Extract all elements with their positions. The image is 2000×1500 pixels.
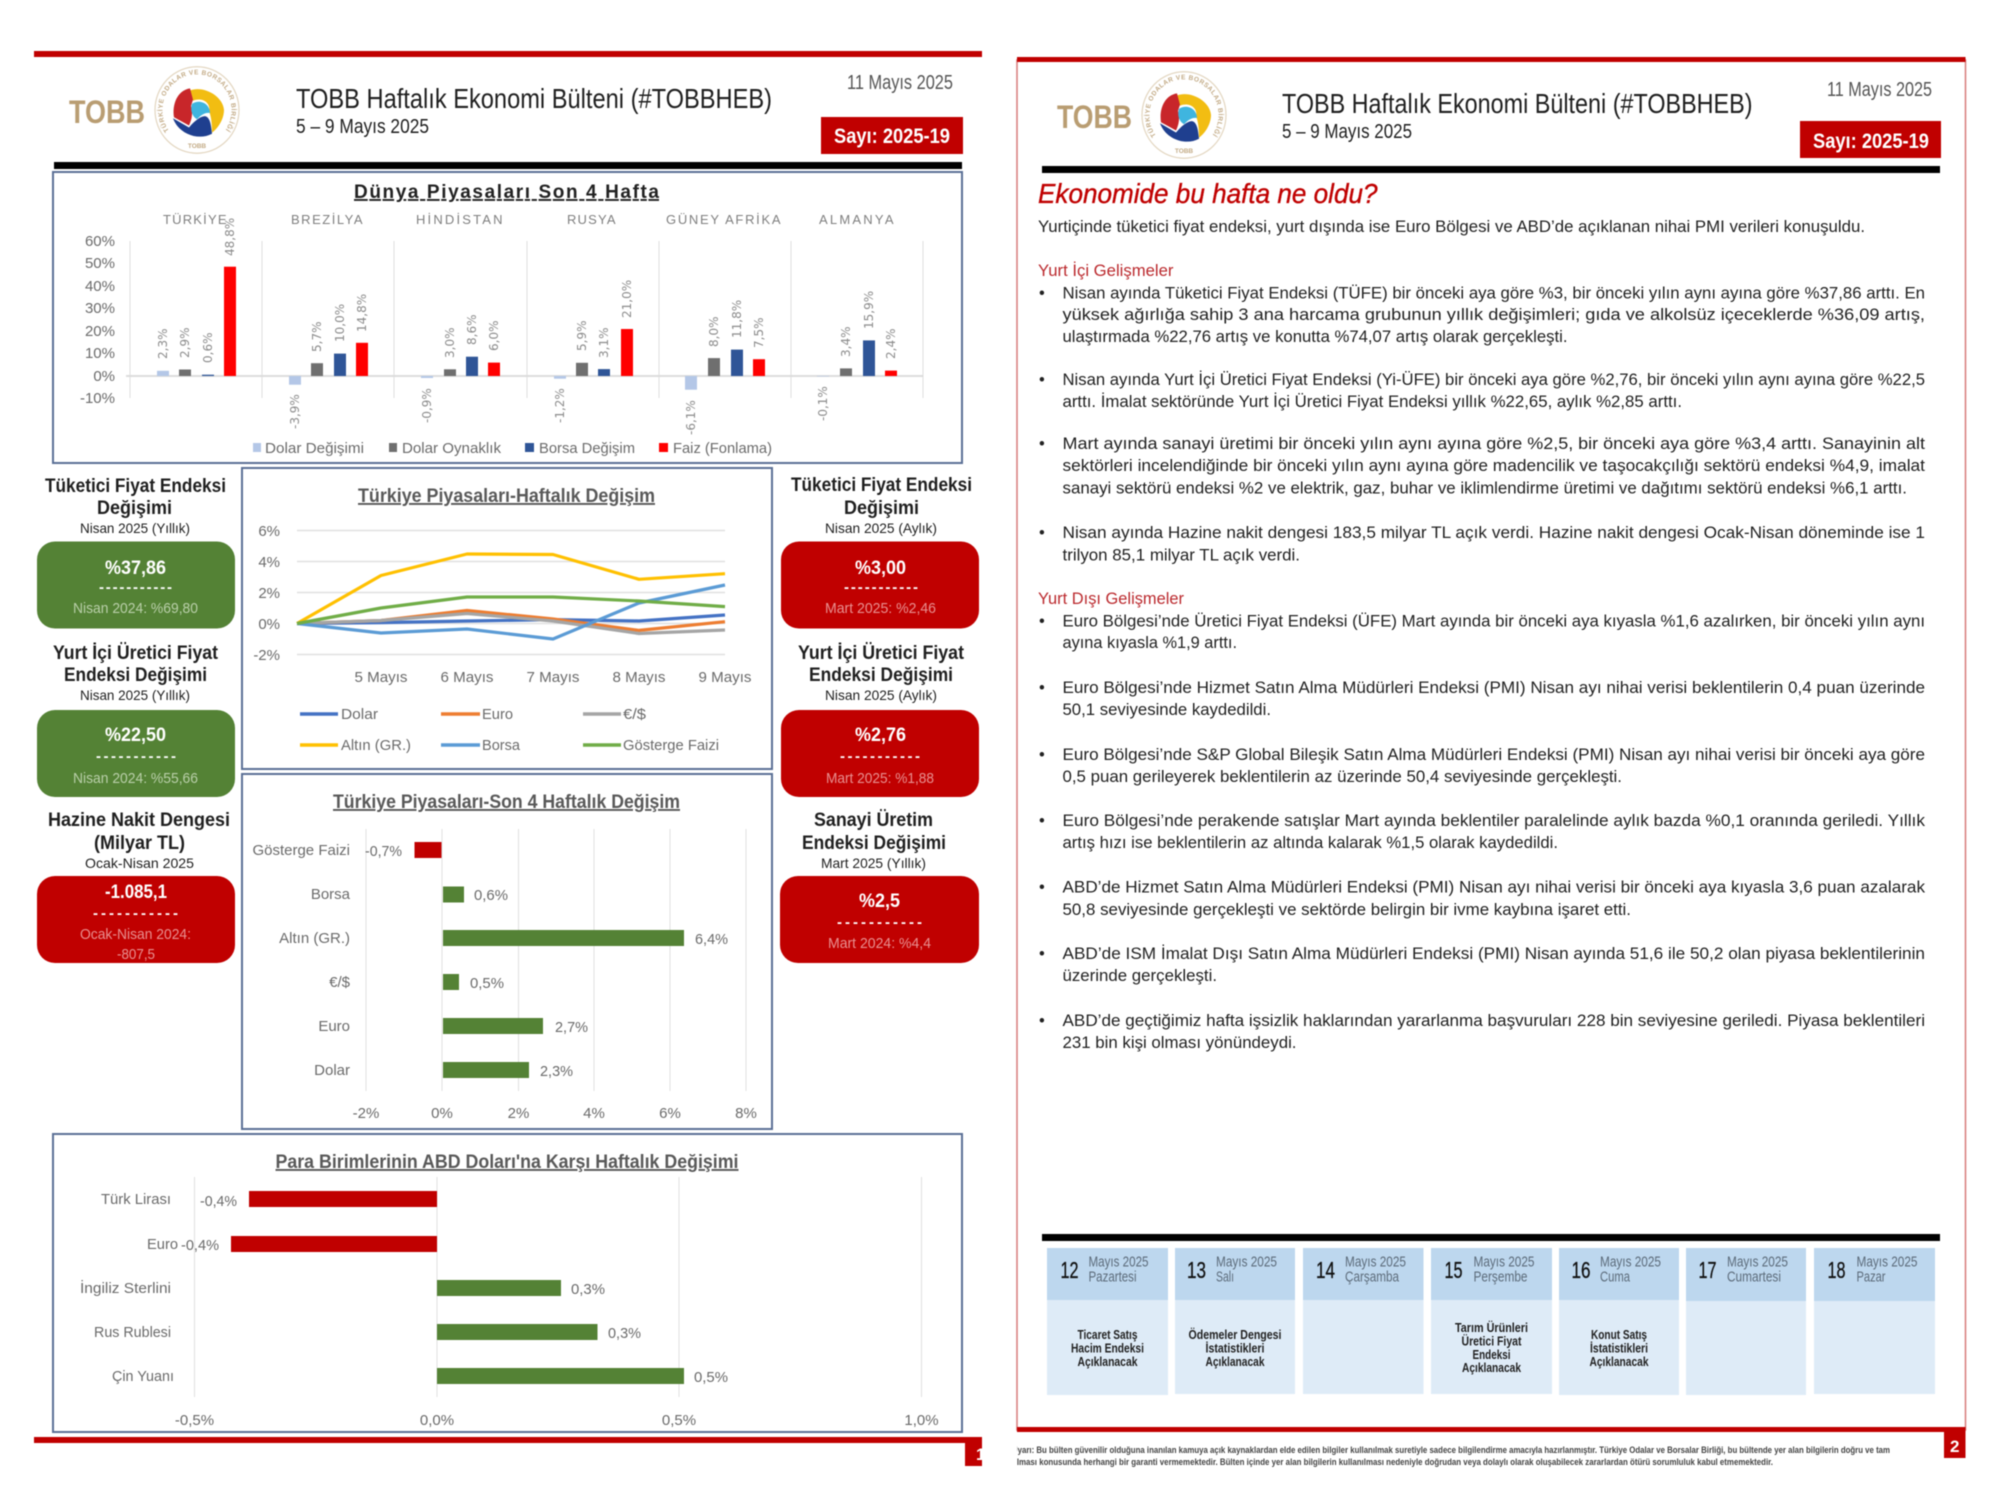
page 2	[1016, 56, 1967, 1468]
report dates: 5 – 9 Mayıs 2025	[1282, 121, 1412, 143]
day: 13 Mayıs: Ödemeler Dengesi	[1188, 1327, 1282, 1342]
x axis labels: 0,5%	[662, 1412, 696, 1429]
KPI: Sanayi üretim: Endeksi Değişimi	[802, 833, 946, 854]
calendar	[1047, 1248, 1935, 1395]
bullet list: domestic	[1039, 284, 1925, 564]
category labels: Borsa	[311, 886, 351, 903]
KPI: Sanayi üretim: -----------	[837, 914, 922, 931]
KPI: TÜFE yıllık: Tüketici Fiyat Endeksi	[45, 476, 226, 497]
y axis labels: 20%	[85, 323, 115, 340]
bullet list: domestic: •	[1039, 524, 1045, 542]
foreign developments: Yurt Dışı Gelişmeler	[1038, 589, 1184, 608]
value labels: 0,5%	[470, 975, 504, 992]
bullet list: foreign: •	[1039, 679, 1045, 697]
publication date: 11 Mayıs 2025	[1827, 79, 1932, 101]
chart title: Dünya Piyasaları Son 4 Hafta	[354, 182, 659, 203]
rotated value labels: 0,6%	[201, 332, 215, 363]
category labels: €/$	[329, 974, 351, 991]
day: 16 Mayıs: Mayıs 2025	[1600, 1254, 1661, 1270]
country labels: TÜRKİYE	[163, 212, 228, 227]
day: 13 Mayıs	[1175, 1248, 1295, 1394]
KPI: TÜFE yıllık: Nisan 2025 (Yıllık)	[80, 520, 190, 536]
panel: world markets chart	[53, 172, 962, 463]
KPI: Yİ-ÜFE aylık: Mart 2025: %1,88	[826, 770, 934, 787]
logo: TOBB wordmark: TOBB	[1057, 99, 1132, 135]
x axis labels: 0,0%	[420, 1412, 454, 1429]
country labels: GÜNEY AFRİKA	[666, 212, 782, 227]
rotated value labels: 3,4%	[839, 326, 853, 357]
report title: TOBB Haftalık Ekonomi Bülteni (#TOBBHEB)	[1282, 88, 1752, 119]
rotated value labels: 3,0%	[443, 328, 457, 358]
bars	[414, 842, 684, 1078]
legend: Altın (GR.)	[341, 737, 411, 754]
legend: Dolar Değişimi	[265, 440, 364, 457]
KPI: Hazine nakit dengesi: -1.085,1	[105, 882, 167, 903]
day: 13 Mayıs: Mayıs 2025	[1216, 1254, 1277, 1270]
rotated value labels: 15,9%	[862, 291, 876, 329]
intro sentence: Yurtiçinde tüketici fiyat endeksi, yurt dışında ise Euro Bölgesi ve ABD’de açıklanan nihai PMI verileri konuşuldu.	[1038, 218, 1865, 236]
x axis labels: 2%	[508, 1105, 529, 1122]
icon: TOBB seal	[154, 66, 240, 154]
value labels: -0,4%	[200, 1193, 237, 1210]
legend: €/$	[623, 706, 647, 723]
bullet list: foreign: Euro Bölgesi’nde S&P Global Bileşik Satın Alma Müdürleri Endeksi (PMI) Nisan ayı nihai verisi bir önceki aya göre	[1062, 746, 1925, 764]
panel: weekly line chart	[242, 468, 772, 769]
day: 18 Mayıs: 18	[1828, 1257, 1846, 1283]
day: 17 Mayıs: Mayıs 2025	[1727, 1254, 1788, 1270]
y axis labels	[253, 523, 280, 664]
KPI: Yİ-ÜFE aylık: -----------	[840, 748, 920, 765]
bullet list: domestic: Nisan ayında Yurt İçi Üretici Fiyat Endeksi (Yi-ÜFE) bir önceki aya göre %2,76, bir önceki yılın aynı ayına göre %22,5	[1062, 370, 1925, 389]
KPI: TÜFE aylık: Mart 2025: %2,46	[825, 600, 936, 617]
legend: Borsa Değişim	[539, 440, 635, 457]
day: 18 Mayıs: Pazar	[1856, 1268, 1886, 1286]
rotated value labels: -0,1%	[816, 386, 830, 421]
y axis labels: 10%	[85, 345, 115, 362]
bottom red rule and page number 2: 2	[1950, 1437, 1959, 1456]
value labels: 0,3%	[608, 1325, 641, 1342]
black rule above calendar	[1042, 1234, 1940, 1241]
x axis labels: -2%	[353, 1105, 379, 1122]
x axis labels: 7 Mayıs	[526, 669, 580, 686]
legend: Euro	[482, 706, 513, 723]
x axis labels: 6 Mayıs	[440, 669, 494, 686]
KPI: Hazine nakit dengesi: -----------	[93, 905, 178, 922]
bullet list: foreign: ayına kıyasla %1,9 arttı.	[1062, 634, 1237, 652]
bullet list: foreign: •	[1039, 1012, 1045, 1030]
KPI: Yİ-ÜFE yıllık: -----------	[96, 748, 176, 765]
x axis labels: -0,5%	[175, 1412, 214, 1429]
KPI: Sanayi üretim: %2,5	[859, 891, 900, 912]
section heading: Ekonomide bu hafta ne oldu?	[1038, 178, 1378, 209]
day: 14 Mayıs: Çarşamba	[1345, 1268, 1400, 1286]
bullet list: foreign: ABD’de ISM İmalat Dışı Satın Alma Müdürleri Endeksi (PMI) Nisan ayında 51,6 ile 50,2 olan piyasa beklentilerinin	[1062, 944, 1925, 963]
rotated value labels: 7,5%	[752, 318, 766, 348]
x axis labels: 9 Mayıs	[698, 669, 752, 686]
publication date: 11 Mayıs 2025	[847, 72, 953, 94]
rotated value labels: 2,3%	[156, 328, 170, 359]
KPI: Sanayi üretim: Sanayi Üretim	[814, 810, 933, 831]
legend: Dolar Oynaklık	[402, 440, 501, 457]
disclaimer: olması konusunda herhangi bir garanti vermemektedir. Bülten içinde yer alan bilgilerin kullanılması nedeniyle doğrudan veya dolaylı olarak oluşabilecek zararlardan ötürü sorumluluk kabul etmemektedir.	[1012, 1457, 1773, 1467]
line series	[297, 554, 725, 639]
x axis labels: 0%	[431, 1105, 453, 1122]
bullet list: foreign: •	[1039, 878, 1045, 896]
KPI: Hazine nakit dengesi	[37, 810, 235, 963]
chart title: Türkiye Piyasaları-Son 4 Haftalık Değişim	[333, 792, 680, 813]
rotated value labels: 5,7%	[310, 322, 324, 352]
bullet list: domestic: ulaştırmada %22,76 artış ve konutta %74,07 artış olarak gerçekleşti.	[1062, 328, 1568, 346]
x axis labels: 8%	[735, 1105, 757, 1122]
bullet list: foreign: •	[1039, 746, 1045, 764]
day: 16 Mayıs: İstatistikleri	[1590, 1340, 1648, 1356]
black rule page 1	[54, 162, 962, 169]
icon: TOBB seal: TOBB	[1175, 148, 1193, 155]
chart title: Türkiye Piyasaları-Haftalık Değişim	[358, 486, 655, 507]
rotated value labels: 2,9%	[178, 328, 192, 358]
x axis labels	[353, 1105, 757, 1122]
domestic developments	[1038, 261, 1925, 564]
KPI: TÜFE yıllık: -----------	[99, 579, 172, 596]
category labels: Türk Lirası	[101, 1191, 171, 1208]
day: 14 Mayıs	[1303, 1248, 1424, 1394]
bottom red rule and page number 2	[1017, 1427, 1966, 1458]
KPI: Yİ-ÜFE aylık: Endeksi Değişimi	[809, 665, 953, 686]
day: 12 Mayıs: Açıklanacak	[1078, 1355, 1138, 1369]
rotated value labels	[156, 218, 898, 435]
day: 13 Mayıs: Açıklanacak	[1206, 1355, 1265, 1369]
day: 18 Mayıs: Mayıs 2025	[1856, 1254, 1918, 1270]
y axis labels: 6%	[258, 523, 280, 540]
bullet list: domestic: sektörleri incelendiğinde bir önceki yılın aynı ayına göre madencilik ve taşocakçılığı sektörü endeksi %4,9, imalat	[1062, 457, 1925, 475]
rotated value labels: 5,9%	[575, 320, 589, 351]
category labels: Gösterge Faizi	[252, 842, 350, 859]
x axis labels	[175, 1412, 939, 1429]
bullet list: domestic: •	[1039, 435, 1045, 453]
day: 15 Mayıs: Üretici Fiyat	[1462, 1334, 1522, 1348]
y axis labels: 2%	[258, 585, 280, 602]
day: 15 Mayıs: Perşembe	[1474, 1268, 1528, 1286]
report dates: 5 – 9 Mayıs 2025	[296, 116, 429, 138]
domestic developments: Yurt İçi Gelişmeler	[1038, 261, 1174, 280]
bullet list: domestic: •	[1039, 371, 1045, 389]
KPI: Yİ-ÜFE aylık: %2,76	[855, 725, 906, 746]
bullet list: foreign: 0,5 puan gerileyerek beklentilerin az üzerinde 50,4 seviyesinde gerçekleşti.	[1062, 768, 1622, 786]
day: 12 Mayıs: 12	[1060, 1257, 1078, 1283]
value labels: -0,7%	[365, 843, 402, 860]
bullet list: foreign: •	[1039, 945, 1045, 963]
value labels: 0,5%	[694, 1369, 728, 1386]
rotated value labels: 8,6%	[465, 314, 479, 345]
bullet list: domestic: Nisan ayında Hazine nakit dengesi 183,5 milyar TL açık verdi. Hazine nakit dengesi Ocak-Nisan döneminde ise 1	[1062, 524, 1925, 542]
rotated value labels: -3,9%	[288, 394, 302, 429]
icon: TOBB seal: TÜRKİYE ODALAR VE BORSALAR BİRLİĞİ	[156, 69, 238, 134]
category labels: Euro	[147, 1236, 178, 1253]
KPI: TÜFE yıllık: Nisan 2024: %69,80	[73, 600, 198, 617]
bullet list: foreign: ABD’de Hizmet Satın Alma Müdürleri Endeksi (PMI) Nisan ayı nihai verisi bir önceki aya kıyasla 3,6 puan azalarak	[1062, 878, 1926, 896]
icon: TOBB seal	[1141, 70, 1227, 160]
top red rule page 2	[1017, 57, 1966, 62]
y axis labels: 4%	[258, 554, 280, 571]
KPI: Yİ-ÜFE yıllık: Nisan 2025 (Yıllık)	[80, 687, 190, 703]
y axis labels: 50%	[85, 255, 115, 272]
day: 17 Mayıs: 17	[1698, 1257, 1716, 1283]
KPI: TÜFE aylık: Tüketici Fiyat Endeksi	[791, 475, 972, 496]
chart title: Para Birimlerinin ABD Doları'na Karşı Haftalık Değişimi	[276, 1152, 738, 1173]
y axis labels: 0%	[93, 368, 115, 385]
day: 17 Mayıs: Cumartesi	[1727, 1268, 1781, 1286]
country labels: RUSYA	[567, 212, 617, 227]
KPI: TÜFE aylık: %3,00	[855, 558, 906, 579]
day: 16 Mayıs: 16	[1572, 1257, 1590, 1283]
country labels: ALMANYA	[819, 212, 895, 227]
day: 15 Mayıs: Endeksi	[1472, 1348, 1510, 1362]
value labels	[365, 843, 728, 1080]
KPI: TÜFE aylık	[781, 475, 979, 628]
day: 16 Mayıs: Konut Satış	[1591, 1328, 1647, 1342]
day: 15 Mayıs: Mayıs 2025	[1474, 1254, 1534, 1270]
category labels: Euro	[318, 1018, 350, 1035]
rotated value labels: -6,1%	[684, 400, 698, 435]
issue badge: Sayı: 2025-19	[1813, 130, 1929, 153]
KPI: Hazine nakit dengesi: Ocak-Nisan 2024:	[80, 926, 191, 943]
value labels	[181, 1193, 728, 1386]
x axis labels	[354, 669, 752, 686]
x axis labels: 8 Mayıs	[612, 669, 666, 686]
legend: Faiz (Fonlama)	[673, 440, 772, 457]
bullet list: foreign: artış hızı ise beklentilerin az altında kalarak %1,5 olarak kaydedildi.	[1062, 834, 1558, 852]
KPI: TÜFE yıllık	[37, 476, 235, 628]
KPI: Yİ-ÜFE aylık: Nisan 2025 (Aylık)	[825, 687, 937, 703]
KPI: Yİ-ÜFE aylık: Yurt İçi Üretici Fiyat	[798, 643, 965, 664]
day: 12 Mayıs: Mayıs 2025	[1088, 1254, 1148, 1270]
y axis labels	[80, 233, 115, 407]
legend: Borsa	[482, 737, 521, 754]
KPI: Yİ-ÜFE aylık	[781, 643, 979, 797]
bullet list: foreign: Euro Bölgesi’nde Üretici Fiyat Endeksi (ÜFE) Mart ayında bir önceki aya kıyasla %1,6 azalırken, bir önceki yılın aynı	[1062, 612, 1925, 630]
disclaimer: Uyarı: Bu bülten güvenilir olduğuna inanılan kamuya açık kaynaklardan elde edilen bilgiler kullanılmak suretiyle sadece bilgilendirme amacıyla hazırlanmıştır. Türkiye Odalar ve Borsalar Birliği, bu bültende yer alan bilgilerin doğru ve tam	[1012, 1445, 1890, 1455]
legend	[253, 440, 772, 457]
bullet list: foreign	[1039, 612, 1926, 1052]
value labels: 0,3%	[571, 1281, 605, 1298]
y axis labels: 40%	[85, 278, 115, 295]
page frame	[1017, 60, 1966, 1430]
panel: four week bar chart	[242, 774, 772, 1129]
rotated value labels: -1,2%	[553, 388, 567, 423]
issue badge	[821, 117, 963, 154]
bottom red rule and page number 1: 1	[976, 1445, 985, 1464]
y axis labels: -2%	[253, 647, 280, 664]
KPI: TÜFE aylık: Nisan 2025 (Aylık)	[825, 520, 937, 536]
foreign developments	[1038, 589, 1926, 1052]
rotated value labels: 14,8%	[355, 294, 369, 332]
country labels: HİNDİSTAN	[416, 212, 504, 227]
bullet list: foreign: üzerinde gerçekleşti.	[1062, 967, 1217, 985]
category labels	[252, 842, 351, 1079]
KPI: TÜFE yıllık: Değişimi	[97, 498, 172, 519]
x axis labels: 5 Mayıs	[354, 669, 408, 686]
KPI: Sanayi üretim: Mart 2025 (Yıllık)	[821, 855, 926, 871]
day: 15 Mayıs: Açıklanacak	[1462, 1361, 1521, 1375]
value labels: 2,7%	[555, 1019, 588, 1036]
rotated value labels: 6,0%	[487, 320, 501, 351]
y axis labels: -10%	[80, 390, 115, 407]
value labels: -0,4%	[181, 1237, 219, 1254]
bullet list: foreign: Euro Bölgesi’nde Hizmet Satın Alma Müdürleri Endeksi (PMI) Nisan ayı nihai verisi beklentilerin 0,4 puan üzerinde	[1062, 679, 1925, 697]
y axis labels: 60%	[85, 233, 115, 250]
KPI: Hazine nakit dengesi: Hazine Nakit Dengesi	[48, 810, 230, 831]
KPI: Hazine nakit dengesi: -807,5	[117, 946, 155, 963]
day: 15 Mayıs: 15	[1444, 1257, 1462, 1283]
rotated value labels: -0,9%	[420, 388, 434, 423]
day: 17 Mayıs	[1686, 1248, 1806, 1395]
panel: currencies against USD	[53, 1134, 962, 1432]
day: 16 Mayıs: Açıklanacak	[1590, 1355, 1649, 1369]
day: 16 Mayıs	[1559, 1248, 1679, 1395]
rotated value labels: 10,0%	[333, 304, 347, 342]
bullet list: domestic: arttı. İmalat sektöründe Yurt İçi Üretici Fiyat Endeksi yıllık %22,65, aylık %2,85 arttı.	[1062, 392, 1682, 411]
bullet list: foreign: •	[1039, 812, 1045, 830]
value labels: 6,4%	[695, 931, 728, 948]
bullet list: foreign: 231 bin kişi olması yönündeydi.	[1062, 1034, 1296, 1052]
rotated value labels: 8,0%	[707, 316, 721, 347]
day: 15 Mayıs: Tarım Ürünleri	[1455, 1320, 1528, 1335]
bars: dolar oynaklık	[179, 358, 852, 376]
bullet list: foreign: 50,8 seviyesinde gerçekleşti ve sektörde belirgin bir ivme kaybına işaret etti.	[1062, 901, 1631, 919]
KPI: Yİ-ÜFE yıllık	[37, 643, 235, 797]
logo: TOBB wordmark: TOBB	[69, 94, 145, 130]
KPI: Hazine nakit dengesi: Ocak-Nisan 2025	[85, 855, 194, 871]
top red rule page 1	[34, 51, 982, 57]
rotated value labels: 2,4%	[884, 328, 898, 359]
bottom red rule and page number 1	[34, 1437, 985, 1466]
KPI: Yİ-ÜFE yıllık: Nisan 2024: %55,66	[73, 770, 198, 787]
rotated value labels: 3,1%	[597, 328, 611, 358]
bullet list: domestic: sanayi sektörü endeksi %2 ve elektrik, gaz, buhar ve iklimlendirme üretimi ve dağıtımı sektörü endeksi %6,1 arttı.	[1062, 480, 1907, 498]
category labels: İngiliz Sterlini	[80, 1279, 171, 1297]
rotated value labels: 11,8%	[730, 300, 744, 338]
day: 12 Mayıs: Hacim Endeksi	[1071, 1342, 1144, 1356]
category labels: Dolar	[314, 1062, 350, 1079]
KPI: Hazine nakit dengesi: (Milyar TL)	[94, 833, 185, 854]
category labels: Çin Yuanı	[112, 1368, 174, 1385]
legend	[300, 706, 719, 754]
country labels	[163, 212, 895, 227]
y axis labels: 0%	[258, 616, 280, 633]
day: 12 Mayıs	[1047, 1248, 1168, 1395]
KPI: Yİ-ÜFE yıllık: Endeksi Değişimi	[64, 665, 207, 686]
bullet list: domestic: •	[1039, 284, 1045, 302]
KPI: Yİ-ÜFE yıllık: Yurt İçi Üretici Fiyat	[53, 643, 219, 664]
icon: TOBB seal: TOBB	[188, 143, 206, 150]
country labels: BREZİLYA	[291, 212, 364, 227]
x axis labels: 1,0%	[904, 1412, 939, 1429]
category labels: Rus Rublesi	[94, 1324, 171, 1341]
category labels: Altın (GR.)	[279, 930, 350, 947]
disclaimer	[1012, 1445, 1890, 1467]
bullet list: foreign: Euro Bölgesi’nde perakende satışlar Mart ayında beklentiler paralelinde aylık bazda %0,1 oranında geriledi. Yıllık	[1062, 812, 1926, 830]
bars: faiz	[224, 267, 897, 376]
bullet list: domestic: trilyon 85,1 milyar TL açık verdi.	[1062, 546, 1300, 564]
bullet list: foreign: ABD’de geçtiğimiz hafta işsizlik haklarından yararlanma başvuruları 228 bin seviyesine geriledi. Piyasa beklentileri	[1062, 1012, 1925, 1030]
bars: borsa değişim	[202, 340, 875, 376]
x axis labels: 4%	[583, 1105, 605, 1122]
bars: dolar değişimi	[157, 371, 829, 390]
day: 14 Mayıs: Mayıs 2025	[1345, 1254, 1406, 1270]
legend: Dolar	[341, 706, 378, 723]
KPI: TÜFE aylık: Değişimi	[844, 498, 919, 519]
page 1	[33, 50, 983, 1467]
issue badge	[1800, 121, 1941, 158]
day: 13 Mayıs: İstatistikleri	[1206, 1340, 1264, 1356]
value labels: 2,3%	[540, 1063, 573, 1080]
legend: Gösterge Faizi	[623, 737, 719, 754]
day: 16 Mayıs: Cuma	[1600, 1268, 1630, 1286]
value labels: 0,6%	[474, 887, 508, 904]
x axis labels: 6%	[659, 1105, 681, 1122]
day: 14 Mayıs: 14	[1316, 1257, 1335, 1283]
bullet list: foreign: •	[1039, 612, 1045, 630]
bullet list: domestic: yüksek ağırlığa sahip 3 ana harcama grubunun yıllık değişimleri; gıda ve alkolsüz içeceklerde %36,09 artış,	[1062, 306, 1925, 324]
day: 13 Mayıs: Salı	[1216, 1268, 1234, 1286]
icon: TOBB seal: TÜRKİYE ODALAR VE BORSALAR BİRLİĞİ	[1143, 74, 1224, 138]
rotated value labels: 48,8%	[223, 218, 237, 256]
category labels	[80, 1191, 178, 1385]
KPI: TÜFE yıllık: %37,86	[105, 558, 166, 579]
day: 15 Mayıs	[1431, 1248, 1552, 1394]
day: 12 Mayıs: Ticaret Satış	[1078, 1328, 1138, 1342]
KPI: Sanayi üretim	[780, 810, 979, 963]
KPI: Yİ-ÜFE yıllık: %22,50	[105, 725, 166, 746]
day: 12 Mayıs: Pazartesi	[1088, 1268, 1136, 1286]
KPI: Sanayi üretim: Mart 2024: %4,4	[828, 935, 931, 952]
day: 18 Mayıs	[1814, 1248, 1935, 1394]
black rule page 2	[1042, 166, 1940, 173]
rotated value labels: 21,0%	[620, 280, 634, 318]
bullet list: domestic: Mart ayında sanayi üretimi bir önceki yılın aynı ayına göre %2,5, bir önceki aya göre %3,4 arttı. Sanayinin alt	[1062, 435, 1925, 453]
bullet list: domestic: Nisan ayında Tüketici Fiyat Endeksi (TÜFE) bir önceki aya göre %3, bir önceki yılın aynı ayına göre %37,86 arttı. En	[1062, 284, 1925, 302]
y axis labels: 30%	[85, 300, 115, 317]
day: 13 Mayıs: 13	[1187, 1257, 1206, 1283]
KPI: TÜFE aylık: -----------	[844, 579, 918, 596]
issue badge: Sayı: 2025-19	[834, 125, 950, 148]
bars	[231, 1191, 684, 1384]
bullet list: foreign: 50,1 seviyesinde kaydedildi.	[1062, 701, 1271, 719]
report title: TOBB Haftalık Ekonomi Bülteni (#TOBBHEB)	[296, 83, 772, 114]
